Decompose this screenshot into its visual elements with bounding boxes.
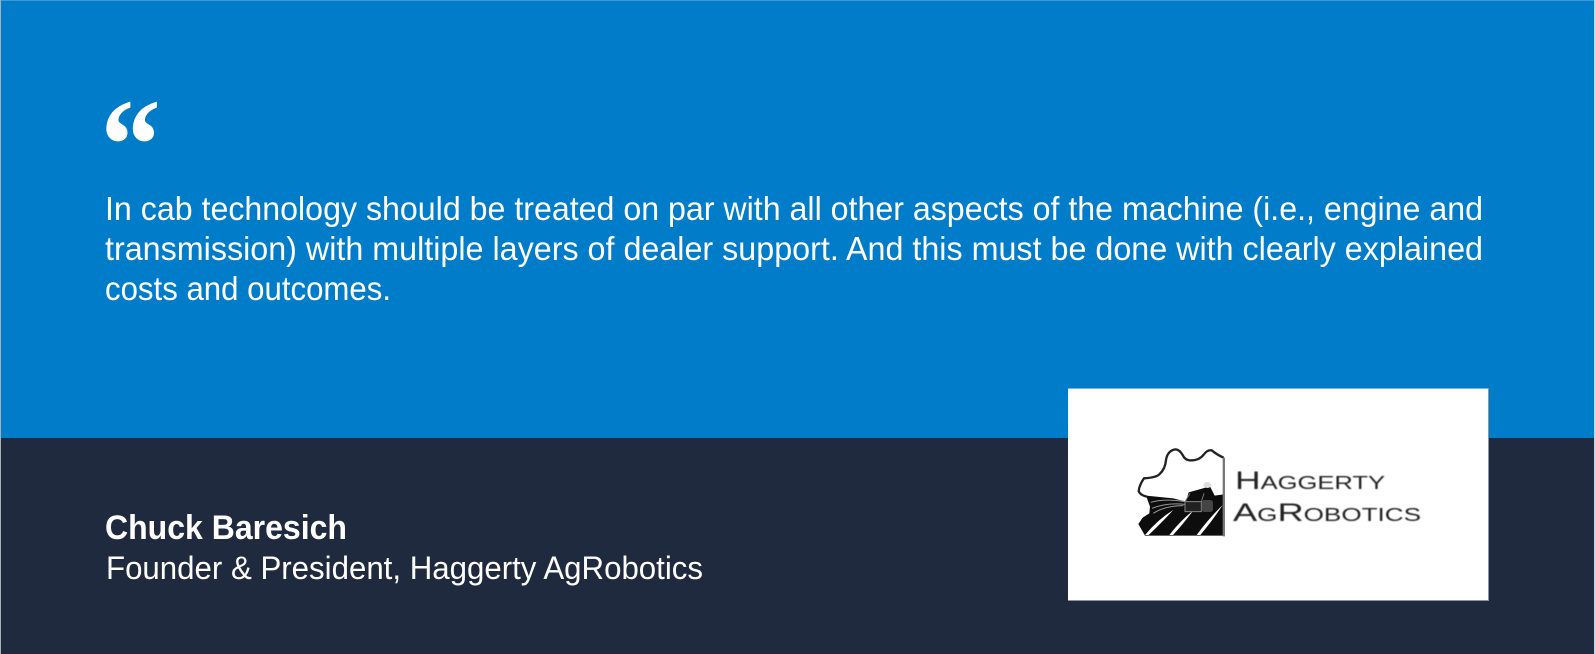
attribution title: Founder & President, Haggerty AgRobotics — [106, 550, 703, 586]
quote text: In cab technology should be treated on par with all other aspects of the machine (i.e., engine and — [105, 190, 1483, 227]
logo wordmark — [1233, 467, 1421, 527]
quote text: transmission) with multiple layers of dealer support. And this must be done with clearly explained — [105, 230, 1483, 267]
icon: Haggerty AgRobotics field and tractor emblem — [1138, 449, 1225, 536]
quote text — [105, 190, 1483, 307]
attribution name: Chuck Baresich — [105, 509, 347, 547]
icon: opening quotation mark: “ — [100, 73, 161, 218]
logo wordmark: A G R OBOTICS — [1233, 499, 1421, 527]
panel: logo card — [1068, 388, 1489, 601]
panel: attribution background — [0, 438, 1595, 654]
logo wordmark: H AGGERTY — [1235, 467, 1385, 495]
quote text: costs and outcomes. — [105, 270, 391, 307]
panel: quote background — [0, 0, 1595, 438]
